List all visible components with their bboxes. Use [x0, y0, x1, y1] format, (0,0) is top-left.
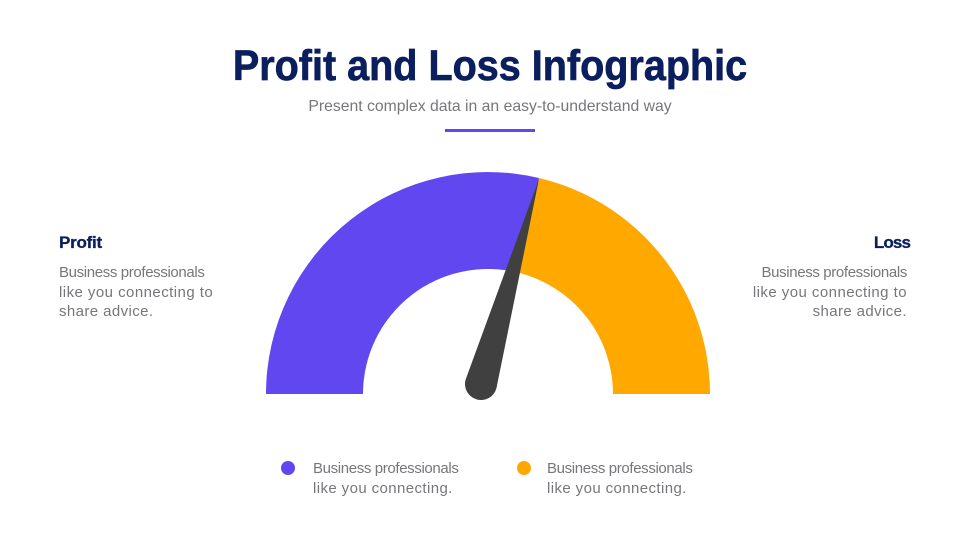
legend text: profit — [313, 460, 458, 496]
profit description: like you connecting to — [59, 284, 213, 300]
legend item: profit — [281, 460, 458, 496]
loss heading: Loss — [874, 233, 910, 252]
title underline — [445, 129, 535, 132]
loss description: share advice. — [813, 303, 907, 320]
legend text: loss: Business professionals — [547, 460, 692, 477]
panel: profit text — [59, 233, 213, 320]
loss description: like you connecting to — [753, 284, 907, 300]
panel: loss text — [753, 233, 910, 320]
title: Profit and Loss Infographic — [233, 42, 747, 90]
legend dot: purple — [281, 461, 295, 475]
profit heading: Profit — [59, 233, 102, 252]
legend item: loss — [517, 460, 692, 496]
subtitle: Present complex data in an easy-to-understand way — [308, 98, 672, 115]
gauge needle — [465, 179, 539, 400]
gauge segment: loss — [519, 178, 710, 394]
profit description: share advice. — [59, 303, 153, 320]
gauge segment: profit — [266, 172, 539, 394]
legend text: profit: like you connecting. — [313, 480, 453, 496]
legend text: loss: like you connecting. — [547, 480, 687, 496]
legend text: profit: Business professionals — [313, 460, 458, 477]
profit description: Business professionals — [59, 264, 204, 281]
profit description — [59, 264, 213, 320]
loss description — [753, 264, 907, 320]
legend text: loss — [547, 460, 692, 496]
legend dot: orange — [517, 461, 531, 475]
loss description: Business professionals — [762, 264, 907, 281]
